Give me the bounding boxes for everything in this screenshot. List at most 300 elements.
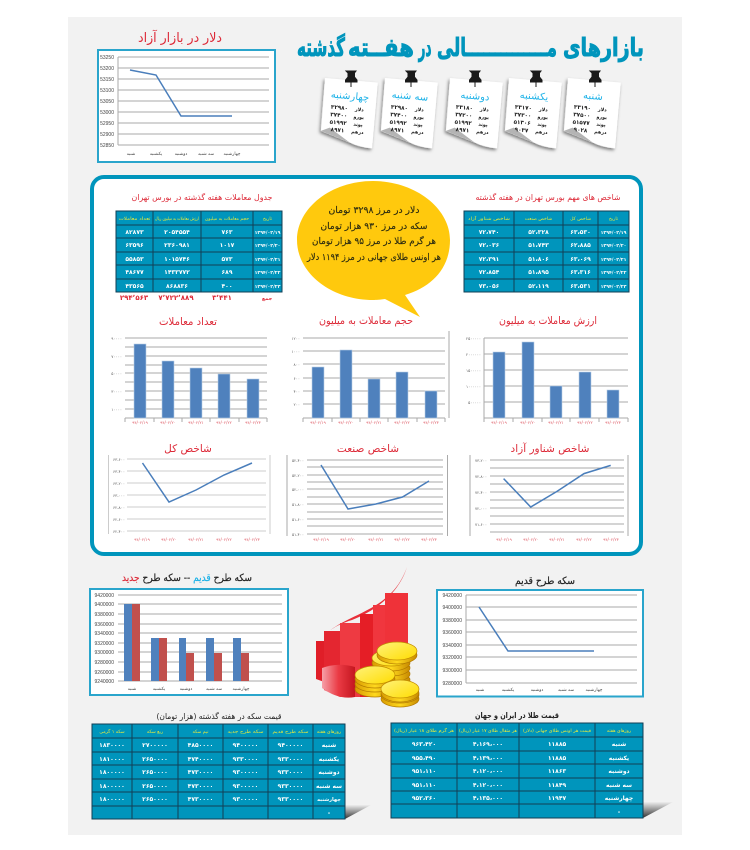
line chart: floating index: ۷۲،۴۰۰	[475, 490, 487, 495]
indices table: ۵۱،۸۹۵	[528, 269, 549, 276]
transactions totals row	[120, 294, 273, 302]
note: Tuesday: درهم	[411, 130, 424, 136]
bar chart: trade value: ۲۰۰۰۰۰۰	[466, 352, 481, 357]
gold price table: ۱۱۹۴۷	[548, 795, 566, 802]
line chart: old coin: 9320000	[443, 655, 462, 661]
main title: بازارهای	[563, 33, 644, 62]
bar chart: trade value: ۹۴/۰۲/۲۲	[577, 420, 593, 425]
gold price table: یکشنبه	[609, 755, 629, 762]
yellow speech bubble: سکه در مرز ۹۳۰ هزار تومان	[320, 222, 428, 232]
grouped bar chart: old vs new coin: 9340000	[95, 631, 114, 637]
dollar line chart: 53100	[100, 88, 114, 94]
note: Tuesday: ۳۲۹۸۰	[391, 105, 408, 112]
note: Tuesday: پوند	[413, 123, 423, 128]
yellow speech bubble: هر اونس طلای جهانی در مرز ۱۱۹۴ دلار	[306, 253, 441, 263]
note: Sunday: درهم	[535, 130, 548, 136]
gold price table: ۱۱۸۴۹	[548, 782, 566, 789]
transactions table: ۱۰۱۷	[220, 242, 235, 249]
transactions table: ۷۶۳	[222, 229, 233, 236]
line chart: old coin: شنبه	[476, 688, 485, 693]
transactions table: ارزش معاملات به میلیون ریال	[155, 217, 199, 222]
bar chart: trade volume: ۹۴/۰۲/۱۹	[310, 420, 326, 425]
coin price table: ۱۸۳۰۰۰۰	[99, 742, 125, 749]
bar chart: trade volume: ۸۰۰	[294, 362, 300, 367]
indices table: ۷۲،۰۳۶	[479, 242, 500, 249]
coin price table: ۹۳۰۰۰۰۰	[233, 796, 258, 803]
note: Monday: یورو	[477, 115, 489, 121]
red swoosh arrow	[328, 567, 407, 632]
coin price table: ۴۷۳۰۰۰۰	[188, 783, 213, 790]
main title: در	[418, 33, 432, 62]
grouped bar chart: old vs new coin: یکشنبه	[153, 686, 166, 692]
chart title: floating index: شاخص شناور آزاد	[511, 442, 589, 455]
note: Sunday: ۳۷۳۰۰	[514, 112, 532, 120]
line chart: floating index: ۷۳،۲۰۰	[475, 458, 487, 463]
indices table: ۵۲،۳۲۸	[528, 229, 549, 236]
gold price table: ۱۱۸۶۳	[548, 768, 566, 775]
gold price table: ۴،۱۲۰،۰۰۰	[473, 782, 503, 789]
line chart: total index: ۹۴/۰۲/۲۱	[188, 537, 204, 542]
indices table: ۷۲،۸۵۴	[479, 269, 500, 276]
coin price table: ۲۶۵۰۰۰۰	[142, 756, 168, 763]
gold price table: ۱۱۸۸۵	[548, 755, 566, 762]
line chart: industry index: ۵۱،۶۰۰	[292, 517, 304, 522]
dollar line chart: چهارشنبه	[224, 152, 241, 157]
note: Tuesday: ۵۱۹۹۲	[389, 120, 407, 127]
gold price table title: قیمت طلا در ایران و جهان	[475, 711, 559, 720]
line chart: total index: ۹۴/۰۲/۲۳	[244, 537, 261, 542]
gold price table: چهارشنبه	[605, 795, 633, 802]
coin price table: ۹۳۳۰۰۰۰	[278, 756, 303, 763]
note: Sunday: پوند	[537, 123, 547, 128]
line chart: floating index: ۷۲،۰۰۰	[475, 506, 487, 511]
indices table: ۵۱،۸۰۶	[528, 256, 549, 263]
grey page panel	[68, 17, 682, 835]
transactions table: ۲۰۵۴۵۵۴	[164, 229, 190, 236]
note: Saturday: دلار	[597, 107, 608, 114]
transactions totals row: ۷٬۷۲۲٬۸۸۹	[158, 294, 194, 302]
note: Saturday: ۵۱۵۷۷	[572, 120, 590, 127]
line chart: total index: ۹۴/۰۲/۲۰	[161, 537, 177, 542]
coin price table: روزهای هفته	[317, 730, 341, 735]
note: Tuesday: ۳۷۴۰۰	[390, 112, 408, 120]
coin price table: ۴۷۴۰۰۰۰	[188, 756, 213, 763]
line chart: floating index	[470, 455, 628, 542]
line chart: industry index	[287, 455, 448, 542]
note: Monday: ۳۷۲۰۰	[455, 112, 473, 120]
line chart: floating index: ۹۴/۰۲/۲۰	[523, 537, 539, 542]
gold price table	[391, 723, 673, 818]
chart title: total index: شاخص کل	[164, 443, 212, 455]
transactions table: ۴۰۰	[222, 283, 232, 290]
dollar line chart: 53050	[100, 99, 114, 105]
grouped bar chart: old vs new coin: 9420000	[95, 593, 114, 599]
note: Sunday: یورو	[536, 115, 548, 121]
yellow speech bubble: هر گرم طلا در مرز ۹۵ هزار تومان	[312, 235, 436, 247]
indices table: ۱۳۹۴/۰۲/۱۹	[601, 230, 627, 236]
note: Saturday: شنبه	[583, 90, 603, 103]
gold price table: ۹۶۳،۴۲۰	[412, 741, 436, 748]
coin price table: ۹۴۰۰۰۰۰	[278, 742, 303, 749]
grouped bar chart: old vs new coin	[90, 589, 288, 695]
transactions table: ۶۳۵۹۶	[125, 242, 144, 249]
grouped bar chart: old vs new coin: 9300000	[95, 650, 114, 656]
coin price table: ۱۸۰۰۰۰۰	[99, 769, 125, 776]
line chart: total index: ۶۳،۰۰۰	[113, 493, 125, 498]
note: Saturday: ۹۰۲۸	[573, 127, 588, 134]
gold price table: ۴،۱۳۹،۰۰۰	[473, 755, 503, 762]
gold price table: ۱۱۸۸۵	[548, 741, 566, 748]
grouped bar chart: old vs new coin: 9280000	[95, 660, 114, 666]
dollar line chart: 53000	[100, 110, 114, 116]
gold price table: قیمت هر اونس طلای جهانی (دلار)	[523, 728, 591, 734]
line chart: old coin: 9340000	[443, 643, 462, 649]
line chart: floating index: ۷۱،۶۰۰	[475, 522, 487, 527]
grouped bar chart: old vs new coin: 9240000	[95, 679, 114, 685]
bar chart: trade volume: ۹۴/۰۲/۲۱	[366, 420, 382, 425]
front left coin stack	[355, 666, 395, 697]
line chart: industry index: ۹۴/۰۲/۲۳	[421, 537, 438, 542]
line chart: floating index: ۹۴/۰۲/۱۹	[496, 537, 512, 542]
indices table: شاخص شناور آزاد	[468, 216, 510, 222]
gold price table: ۹۵۱،۱۱۰	[412, 782, 436, 789]
indices table: ۱۳۹۴/۰۲/۲۲	[601, 270, 627, 276]
coin price table: ۲۷۰۰۰۰۰	[142, 742, 168, 749]
bar chart: trade volume: ۴۰۰	[294, 389, 300, 394]
bar chart: trade value: ۹۴/۰۲/۲۱	[548, 420, 564, 425]
coin price table: ۹۳۰۰۰۰۰	[233, 783, 258, 790]
transactions table: ۱۳۹۴/۰۲/۲۳	[255, 284, 281, 290]
line chart: total index: ۹۴/۰۲/۲۲	[216, 537, 232, 542]
grouped bar chart: old vs new coin: 9320000	[95, 641, 114, 647]
line chart: old coin: سه شنبه	[558, 688, 574, 693]
dollar line chart: 52900	[100, 132, 114, 138]
bar chart: trade value: ۲۵۰۰۰۰۰	[466, 336, 481, 341]
line chart: total index: ۶۲،۶۰۰	[113, 517, 125, 522]
indices table: ۶۳،۰۶۹	[570, 256, 591, 263]
bar chart: trade volume: ۱۲۰۰	[291, 336, 300, 341]
grouped bar chart: old vs new coin: 9360000	[95, 622, 114, 628]
grouped bar chart: old vs new coin: دوشنبه	[180, 687, 192, 692]
coin price table: ربع سکه	[147, 729, 163, 735]
note: Saturday	[562, 71, 621, 148]
bar chart: trade value: ۹۴/۰۲/۲۰	[520, 420, 536, 425]
coin price table: ۹۳۳۰۰۰۰	[278, 769, 303, 776]
transactions table: ۶۸۹	[222, 269, 233, 276]
line chart: total index: ۶۲،۸۰۰	[113, 505, 125, 510]
note: Saturday: یورو	[595, 115, 607, 121]
transactions table: ۱۴۳۳۷۷۲	[164, 269, 190, 276]
transactions table: ۸۶۸۸۳۶	[166, 283, 188, 290]
indices table: تاریخ	[609, 217, 619, 222]
coin price table: ۲۶۵۰۰۰۰	[142, 783, 168, 790]
note: Wednesday: ۵۱۹۹۲	[329, 120, 347, 127]
indices table title: شاخص های مهم بورس تهران در هفته گذشته	[476, 192, 621, 202]
transactions table: ۱۳۹۴/۰۲/۱۹	[255, 230, 281, 236]
line chart: old coin: 9300000	[443, 668, 462, 674]
note: Wednesday: دلار	[354, 107, 365, 114]
note: Sunday: دلار	[538, 107, 549, 114]
chart title: number of trades: تعداد معاملات	[159, 316, 217, 328]
line chart: total index: ۶۳،۴۰۰	[113, 469, 125, 474]
back coin stack	[372, 642, 417, 688]
coin price table: ۹۳۳۰۰۰۰	[233, 756, 258, 763]
note: Monday	[444, 71, 503, 148]
coin price table: ۹۳۳۰۰۰۰	[278, 783, 303, 790]
bar chart: trade value: ۹۴/۰۲/۱۹	[491, 420, 507, 425]
note: Tuesday	[379, 71, 438, 148]
bar chart: trade value	[466, 336, 628, 425]
red stair bars	[316, 593, 408, 698]
line chart: total index: ۹۴/۰۲/۱۹	[134, 537, 150, 542]
indices table: ۱۳۹۴/۰۲/۲۰	[601, 243, 626, 249]
transactions table	[116, 211, 282, 292]
main title: گذشته	[297, 33, 345, 62]
transactions table: تاریخ	[263, 217, 273, 222]
note: Monday: ۳۳۱۸۰	[456, 105, 473, 112]
note: Monday: دوشنبه	[460, 90, 490, 103]
grouped bar chart: old vs new coin: 9260000	[95, 670, 114, 676]
coin price table: شنبه	[322, 742, 336, 749]
bar chart: number of trades: ۹۴/۰۲/۲۰	[160, 420, 176, 425]
grouped bar chart: old vs new coin: 9400000	[95, 602, 114, 608]
coin price table: ۱۸۰۰۰۰۰	[99, 783, 125, 790]
transactions table: تعداد معاملات	[118, 217, 151, 222]
indices table: ۶۳،۵۳۰	[570, 229, 591, 236]
note: Tuesday: یورو	[412, 115, 424, 121]
note: Wednesday: ۳۷۴۰۰	[330, 112, 348, 120]
gold price table: شنبه	[612, 741, 626, 748]
gold price table: هر مثقال طلای ۱۷ عیار (ریال)	[459, 728, 518, 734]
note: Monday: ۸۹۷۱	[455, 127, 470, 134]
line chart: floating index: ۹۴/۰۲/۲۲	[576, 537, 592, 542]
note: Wednesday	[319, 71, 378, 148]
coin price table: -	[328, 810, 331, 817]
bar chart: trade volume	[291, 331, 449, 425]
indices table: ۶۲،۸۸۵	[570, 242, 591, 249]
coin price table: ۹۳۳۰۰۰۰	[278, 796, 303, 803]
grouped bar chart: old vs new coin: شنبه	[128, 687, 137, 692]
dollar line chart: یکشنبه	[150, 151, 163, 157]
gold price table: ۹۵۵،۴۹۰	[412, 755, 436, 762]
gold price table: سه شنبه	[606, 782, 632, 789]
line chart: old coin: 9420000	[443, 593, 462, 599]
transactions totals row: ۳٬۴۴۱	[212, 294, 232, 302]
line chart: industry index: ۵۲،۴۰۰	[292, 458, 304, 463]
note: Saturday: درهم	[594, 130, 607, 136]
note: Sunday	[503, 71, 562, 148]
note: Saturday: پوند	[596, 123, 606, 128]
bar chart: number of trades	[111, 336, 267, 425]
coin price table: ۲۶۵۰۰۰۰	[142, 796, 168, 803]
line chart: industry index: ۵۱،۸۰۰	[292, 502, 304, 507]
line chart: total index	[108, 455, 270, 542]
dollar line chart: 53200	[100, 66, 114, 72]
illustration: red growth chart and gold coins	[316, 567, 419, 707]
coin price table: دوشنبه	[318, 769, 340, 776]
bar chart: number of trades: ۷۰۰۰۰	[111, 354, 122, 359]
transactions totals row: ۲۹۴٬۵۶۳	[120, 294, 149, 302]
note: Tuesday: دلار	[414, 107, 425, 114]
bar chart: trade value: ۱۵۰۰۰۰۰	[466, 368, 481, 373]
bar chart: number of trades: ۹۰۰۰۰	[111, 336, 122, 341]
coin price table: سکه طرح جدید	[228, 729, 264, 735]
note: Monday: ۵۱۹۹۲	[454, 120, 472, 127]
coin price table: یکشنبه	[319, 756, 339, 763]
transactions table: ۱۳۹۴/۰۲/۲۲	[255, 270, 281, 276]
gold price table: دوشنبه	[608, 768, 630, 775]
dollar chart section	[98, 29, 275, 162]
note: Tuesday: ۸۹۷۱	[390, 127, 405, 134]
line chart: industry index: ۵۲،۲۰۰	[292, 473, 304, 478]
coin price table	[92, 724, 371, 819]
gold price table: ۴،۱۲۰،۰۰۰	[473, 768, 503, 775]
gold price table: -	[618, 809, 621, 816]
indices table: ۱۳۹۴/۰۲/۲۳	[601, 284, 627, 290]
dollar line chart: شنبه	[127, 152, 136, 157]
bar chart: number of trades: ۹۴/۰۲/۱۹	[132, 420, 148, 425]
transactions table: حجم معاملات به میلیون	[205, 217, 249, 222]
indices table	[464, 211, 629, 292]
coin price table: سه شنبه	[316, 783, 342, 790]
note: Wednesday: ۸۹۷۱	[330, 127, 345, 134]
coin price table title: قیمت سکه در هفته گذشته (هزار تومان)	[156, 711, 282, 721]
dollar line chart: 52850	[100, 143, 114, 149]
note: Wednesday: یورو	[352, 115, 364, 121]
line chart: industry index: ۵۱،۴۰۰	[292, 532, 304, 537]
bar chart: number of trades: ۹۴/۰۲/۲۳	[245, 420, 262, 425]
grouped bar chart: old vs new coin: سه شنبه	[206, 687, 222, 692]
line chart: old coin: 9360000	[443, 630, 462, 636]
gold price table: هر گرم طلای ۱۸ عیار (ریال)	[394, 727, 455, 734]
chart title: trade volume: حجم معاملات به میلیون	[319, 315, 413, 327]
coin price table: ۴۷۳۰۰۰۰	[188, 769, 213, 776]
gold price table: ۴،۱۶۹،۰۰۰	[473, 741, 503, 748]
indices table: ۱۳۹۴/۰۲/۲۱	[601, 257, 626, 263]
bar chart: trade volume: ۹۴/۰۲/۲۳	[423, 420, 440, 425]
coin price table: ۹۳۰۰۰۰۰	[233, 769, 258, 776]
indices table: ۵۲،۱۱۹	[528, 283, 549, 290]
line chart: total index: ۶۳،۶۰۰	[113, 457, 125, 462]
coin price table: ۴۷۳۰۰۰۰	[188, 796, 213, 803]
indices table: ۷۲،۷۴۰	[479, 229, 499, 236]
grouped bar chart: old vs new coin: چهارشنبه	[233, 687, 250, 692]
line chart: old coin: 9400000	[443, 605, 462, 611]
line chart: old coin: 9380000	[443, 618, 462, 624]
indices table: ۷۳،۰۵۶	[479, 283, 500, 290]
indices table: ۷۲،۳۹۱	[479, 256, 499, 263]
note: Sunday: ۹۰۳۷	[514, 127, 529, 134]
indices table: ۶۳،۳۱۶	[570, 269, 591, 276]
bar chart: number of trades: ۱۰۰۰۰	[111, 407, 122, 412]
note: Tuesday: سه شنبه	[391, 90, 429, 104]
line chart: industry index: ۹۴/۰۲/۲۱	[368, 537, 384, 542]
dollar line chart: سه شنبه	[198, 152, 214, 157]
dollar line chart	[98, 50, 275, 162]
indices table: ۵۱،۷۴۳	[528, 242, 549, 249]
bar chart: trade value: ۹۴/۰۲/۲۳	[605, 420, 622, 425]
bar chart: trade value: ۱۰۰۰۰۰۰	[466, 384, 481, 389]
bar chart: number of trades: ۵۰۰۰۰	[111, 371, 122, 376]
bar chart: trade volume: ۱۰۰۰	[291, 349, 300, 354]
bar chart: trade volume: ۲۰۰	[294, 402, 300, 407]
indices table: ۶۳،۵۳۱	[570, 283, 591, 290]
bar chart: number of trades: ۹۴/۰۲/۲۱	[188, 420, 204, 425]
coin price table: ۱۸۰۰۰۰۰	[99, 796, 125, 803]
line chart: industry index: ۹۴/۰۲/۱۹	[313, 537, 329, 542]
coin price table: سکه طرح قدیم	[272, 729, 309, 735]
grouped bar chart: old vs new coin: 9380000	[95, 612, 114, 618]
dollar line chart: دوشنبه	[175, 152, 187, 157]
coin price table: ۹۴۰۰۰۰۰	[233, 742, 258, 749]
dollar line chart: 53250	[100, 55, 114, 61]
line chart: floating index: ۹۴/۰۲/۲۳	[603, 537, 620, 542]
transactions table: ۱۳۹۴/۰۲/۲۱	[255, 257, 280, 263]
note: Monday: دلار	[479, 107, 490, 114]
dollar chart title: دلار در بازار آزاد	[138, 29, 222, 46]
line chart: total index: ۶۲،۴۰۰	[113, 529, 125, 534]
coin price table: سکه ۱ گرمی	[99, 728, 125, 735]
chart title: trade value: ارزش معاملات به میلیون	[499, 315, 597, 327]
bar chart: trade volume: ۹۴/۰۲/۲۰	[338, 420, 354, 425]
indices table: شاخص صنعت	[525, 217, 552, 222]
transactions table: ۱۰۱۵۷۴۶	[164, 256, 190, 263]
note: Monday: پوند	[478, 123, 488, 128]
note: Wednesday: چهارشنبه	[330, 90, 370, 104]
main bordered panel	[92, 177, 641, 554]
coin price table: ۱۸۱۰۰۰۰	[99, 756, 125, 763]
line chart: old coin	[437, 590, 643, 696]
note: Wednesday: درهم	[351, 130, 364, 136]
dollar line chart: 52950	[100, 121, 114, 127]
line chart: old coin: دوشنبه	[531, 688, 543, 693]
line chart: floating index: ۷۲،۸۰۰	[475, 474, 487, 479]
comparison chart title: سکه طرح قدیم -- سکه طرح جدید	[122, 573, 252, 584]
gold price table: ۹۵۱،۱۱۰	[412, 768, 436, 775]
coin price table: چهارشنبه	[317, 797, 341, 803]
bar chart: trade value: ۵۰۰۰۰۰	[468, 400, 481, 405]
line chart: old coin: چهارشنبه	[586, 688, 603, 693]
note: Sunday: ۵۱۳۰۶	[513, 120, 531, 127]
transactions table title: جدول معاملات هفته گذشته در بورس تهران	[132, 192, 273, 202]
coin price table: ۴۸۵۰۰۰۰	[188, 742, 213, 749]
transactions table: ۴۸۶۷۷	[125, 269, 144, 276]
gold price table: ۴،۱۳۵،۰۰۰	[473, 795, 503, 802]
transactions table: ۴۳۵۶۵	[125, 283, 144, 290]
transactions table: ۲۳۶۰۹۸۱	[164, 242, 190, 249]
chart title: industry index: شاخص صنعت	[337, 443, 399, 455]
coin price table: نیم سکه	[192, 729, 209, 735]
dollar line chart: 53150	[100, 77, 114, 83]
main title: مــــــــــــــالی	[437, 33, 557, 62]
bar chart: trade volume: ۶۰۰	[294, 376, 300, 381]
transactions table: ۸۲۸۷۳	[125, 229, 144, 236]
coin price table: ۲۶۵۰۰۰۰	[142, 769, 168, 776]
old coin chart title: سکه طرح قدیم	[515, 576, 575, 587]
line chart: industry index: ۵۲،۰۰۰	[292, 487, 304, 492]
note: Wednesday: پوند	[353, 123, 363, 128]
note: Sunday: ۳۳۱۷۰	[515, 105, 532, 112]
line chart: old coin: یکشنبه	[502, 687, 515, 693]
line chart: floating index: ۹۴/۰۲/۲۱	[549, 537, 565, 542]
indices table: شاخص کل	[570, 216, 591, 222]
transactions table: ۵۷۳	[222, 256, 233, 263]
transactions totals row: جمع	[262, 296, 273, 302]
transactions table: ۱۳۹۴/۰۲/۲۰	[255, 243, 280, 249]
line chart: old coin: 9280000	[443, 681, 462, 687]
main title	[297, 33, 644, 62]
note: Sunday: یکشنبه	[519, 90, 549, 103]
